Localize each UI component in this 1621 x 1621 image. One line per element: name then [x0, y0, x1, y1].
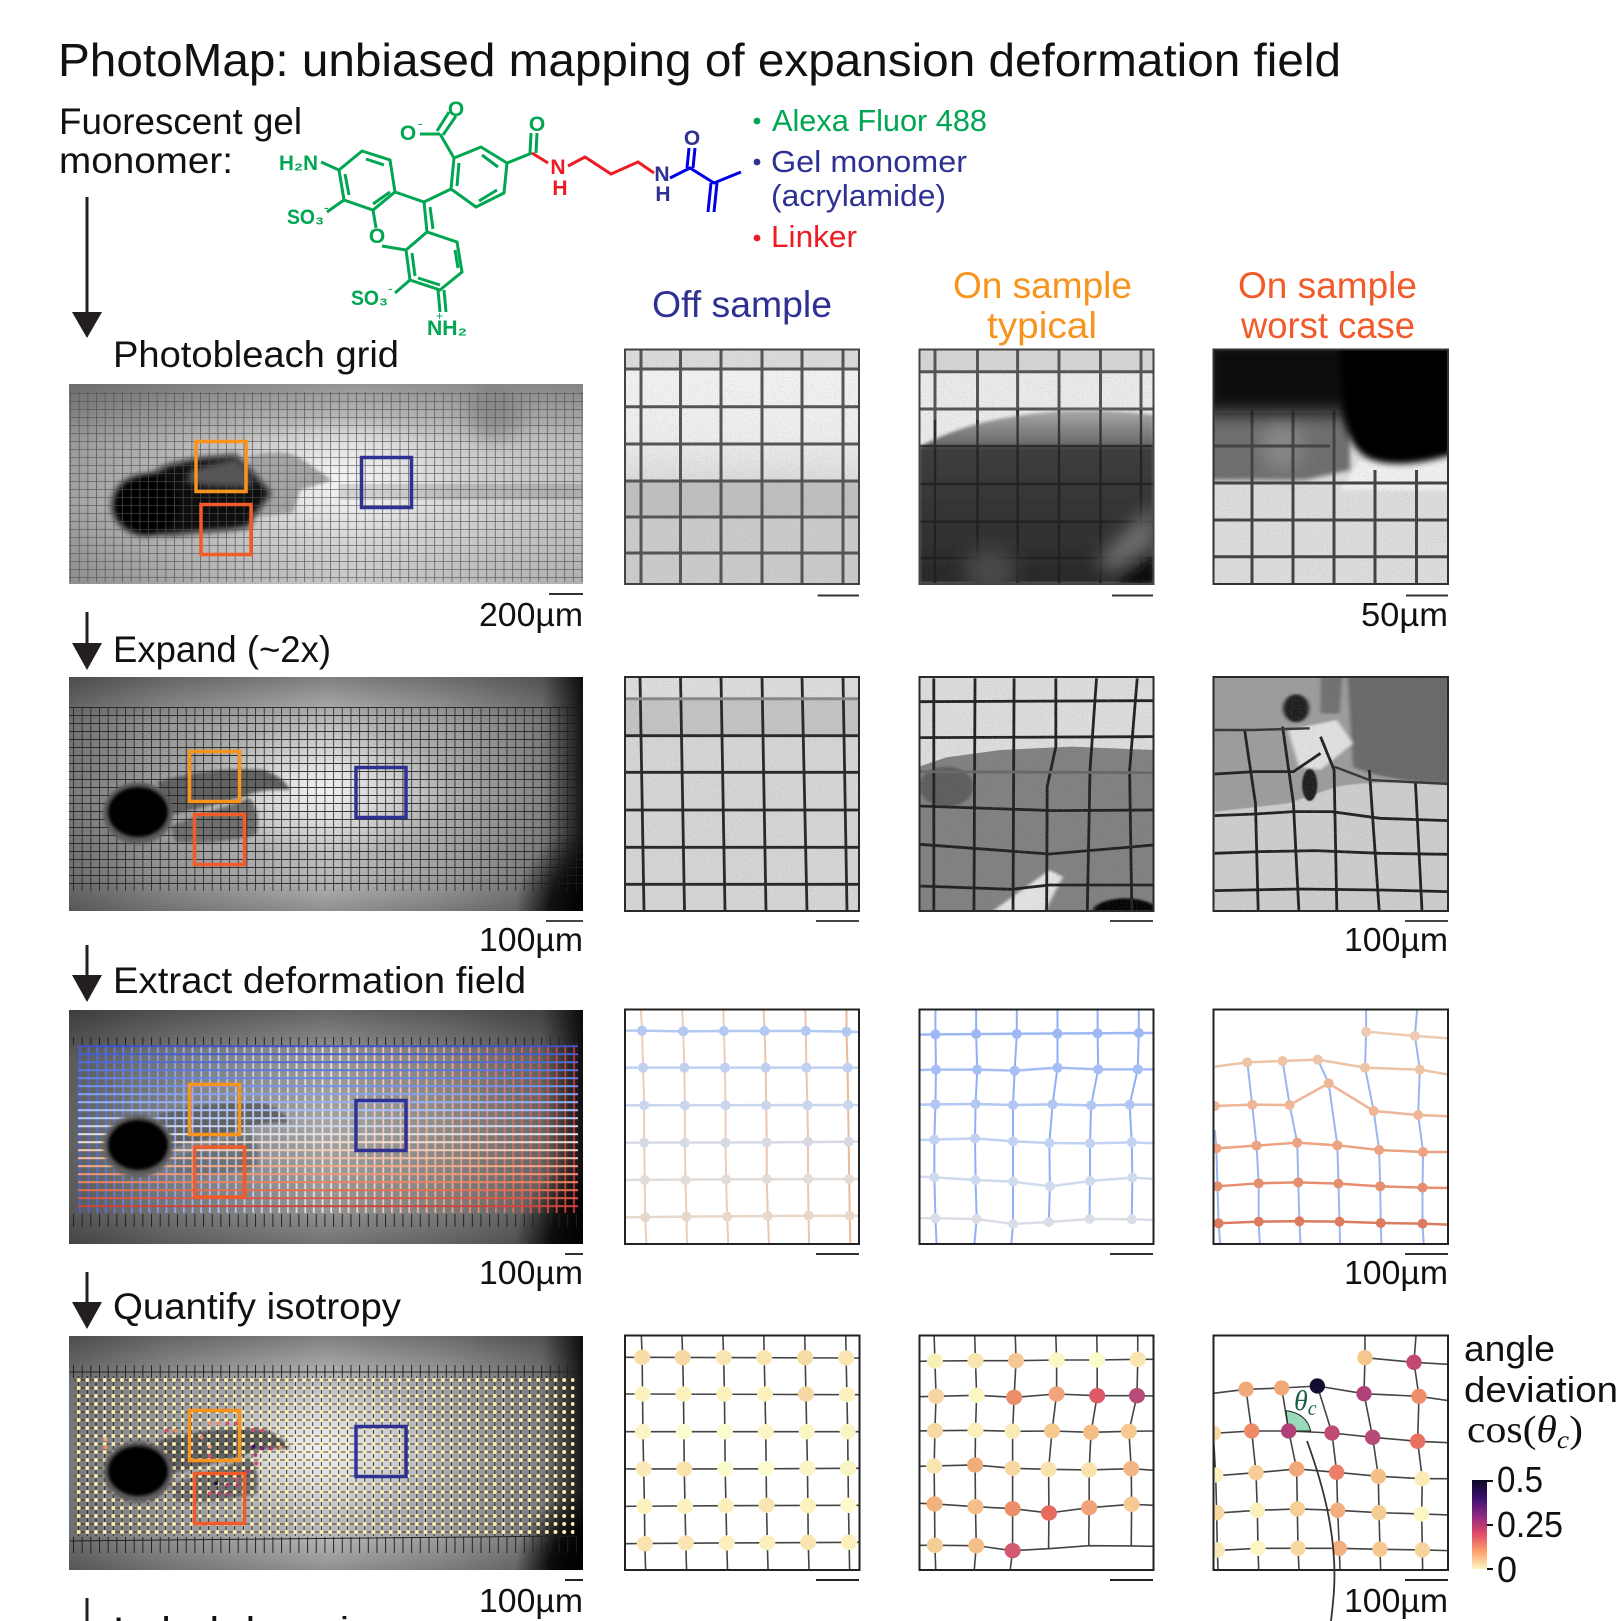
chemical structure: fluorescent gel monomer [279, 98, 741, 340]
frame [1214, 350, 1448, 584]
nodes row 2 [625, 1063, 858, 1073]
frame [920, 677, 1154, 911]
dot grid: local angle deviation [74, 1376, 574, 1536]
panel: isotropy off sample [625, 1336, 859, 1569]
acrylamide part: H [655, 183, 671, 206]
heading: fluorescent gel monomer: monomer: [59, 140, 233, 181]
angle label: theta c: θ [1294, 1386, 1308, 1417]
panel: deformation off sample [625, 1010, 858, 1243]
colorbar heading: angle deviation: deviation [1464, 1369, 1618, 1410]
column heading: on sample typical: On sample [953, 265, 1132, 306]
alexa fluor part: O [400, 122, 416, 145]
panel: expanded on sample typical [920, 678, 1152, 910]
angle label: theta c: c [1308, 1398, 1317, 1420]
colorbar heading: angle deviation [1464, 1328, 1618, 1454]
selection box: worst case [201, 504, 251, 554]
panel: photobleach off sample [624, 349, 860, 584]
frame [920, 350, 1154, 584]
selection box: worst case [194, 1147, 244, 1197]
frame [1214, 1010, 1448, 1244]
arrow: to photobleach grid [72, 197, 102, 338]
frame [1214, 677, 1448, 911]
alexa fluor part: NH₂ [427, 317, 467, 340]
nodes row 4 [1211, 1138, 1449, 1157]
frame [920, 1336, 1154, 1570]
selection box: worst case [194, 814, 244, 864]
frame [1214, 1336, 1448, 1570]
selection box: off sample [356, 1100, 406, 1150]
panel: isotropy overview [69, 1336, 583, 1570]
frame [625, 350, 859, 584]
nodes row 1 [1361, 1027, 1449, 1041]
scale bars and labels: expanded row: 100µm [479, 921, 583, 958]
panel: isotropy on sample typical [919, 1336, 1153, 1569]
scale bars and labels: deformation row: 100µm [1344, 1254, 1448, 1291]
arrow: to quantify isotropy [72, 1272, 102, 1329]
nodes row 5 [919, 1172, 1154, 1191]
column heading: off sample: Off sample [652, 284, 832, 325]
heading: extract deformation field: Extract deformation field [113, 960, 526, 1001]
scale bars and labels: isotropy row: 100µm [479, 1582, 583, 1619]
colorbar heading: angle deviation: cos(θ [1467, 1409, 1555, 1451]
nodes row 1 [625, 1026, 858, 1037]
column heading: on sample typical: typical [987, 305, 1097, 346]
nodes row 3 [919, 1099, 1154, 1110]
panel: photobleach on sample worst case [1214, 350, 1447, 583]
arrow: to extract deformation field [72, 945, 102, 1002]
arrow: to label domains [86, 1598, 88, 1621]
colorbar heading: angle deviation: ) [1569, 1409, 1583, 1451]
selection box: typical [190, 1084, 240, 1134]
frame [625, 1336, 860, 1570]
panel: isotropy on sample worst case [1206, 1336, 1448, 1569]
nodes [1206, 1350, 1430, 1558]
nodes [634, 1350, 857, 1551]
nodes row 3 [1210, 1078, 1449, 1120]
nodes row 1 [919, 1028, 1154, 1039]
panel: photobleach overview image [69, 384, 583, 584]
linker part: H [552, 177, 568, 200]
acrylamide part: O [684, 127, 700, 150]
panel: deformation field overview [69, 1010, 583, 1244]
nodes row 4 [625, 1137, 858, 1148]
nodes row 2 [919, 1063, 1154, 1076]
alexa fluor part: + [436, 309, 443, 323]
legend: structure colours: Gel monomer [771, 144, 967, 179]
nodes row 6 [1214, 1216, 1449, 1229]
nodes row 6 [625, 1211, 858, 1222]
selection box: typical [190, 1410, 240, 1460]
selection box: worst case [194, 1474, 244, 1524]
legend: structure colours: Linker [771, 219, 857, 254]
nodes row 5 [625, 1174, 858, 1185]
scale bars and labels: photobleach row: 200µm [479, 596, 583, 633]
heading: fluorescent gel monomer [59, 101, 302, 181]
scale bars and labels: deformation row: 100µm [479, 1254, 583, 1291]
nodes row 4 [919, 1133, 1154, 1148]
colorbar heading: angle deviation: angle [1464, 1328, 1555, 1369]
callout curve from angle to next step [1307, 1441, 1334, 1621]
panel: photobleach on sample typical [919, 349, 1154, 592]
nodes row 3 [625, 1100, 858, 1110]
nodes row 6 [919, 1213, 1154, 1229]
panel: deformation on sample typical [919, 1010, 1154, 1243]
scale bars and labels: photobleach row: 50µm [1361, 596, 1448, 633]
legend: structure colours [754, 103, 987, 254]
colorbar: cos theta scale: 0 [1497, 1549, 1517, 1590]
column heading: on sample worst case [1238, 265, 1417, 346]
nodes row 2 [1215, 1055, 1449, 1075]
selection box: typical [196, 442, 246, 492]
heading: quantify isotropy: Quantify isotropy [113, 1286, 402, 1327]
selection box: off sample [356, 1426, 406, 1476]
frame [625, 1010, 859, 1244]
acrylamide part: N [654, 163, 670, 186]
column heading: on sample typical [953, 265, 1132, 346]
alexa fluor part: - [388, 280, 393, 296]
legend: structure colours: (acrylamide) [771, 178, 946, 213]
colorbar: cos theta scale [1472, 1459, 1563, 1590]
arrow: to expand [72, 612, 102, 670]
alexa fluor part: O [369, 225, 385, 248]
heading: photobleach grid: Photobleach grid [113, 334, 399, 375]
deformation grid: colour-coded lines [78, 1045, 578, 1213]
linker part: N [550, 156, 566, 179]
colorbar: cos theta scale: 0.5 [1497, 1459, 1543, 1500]
panel: expanded off sample [624, 677, 860, 911]
title: PhotoMap: unbiased mapping of expansion deformation field [58, 34, 1341, 86]
panel: deformation on sample worst case [1210, 1010, 1449, 1243]
alexa fluor part: O [529, 113, 545, 136]
scale bars and labels: expanded row: 100µm [1344, 921, 1448, 958]
alexa fluor part: SO₃ [351, 287, 388, 310]
nodes [926, 1352, 1146, 1558]
column heading: on sample worst case: On sample [1238, 265, 1417, 306]
heading: expand: Expand (~2x) [113, 629, 331, 670]
legend: structure colours: Alexa Fluor 488 [772, 103, 987, 138]
scale bars and labels: deformation row [479, 1254, 1448, 1291]
scale bars and labels: isotropy row [479, 1580, 1448, 1619]
nodes row 5 [1212, 1177, 1449, 1193]
scale bars and labels: expanded row [479, 921, 1448, 958]
colorbar heading: angle deviation: c [1557, 1427, 1569, 1454]
alexa fluor part: O [448, 98, 464, 121]
panel: expanded on sample worst case [1209, 675, 1453, 915]
colorbar: cos theta scale: 0.25 [1497, 1504, 1563, 1545]
frame [920, 1010, 1154, 1244]
panel: expanded overview image [69, 677, 583, 911]
frame [625, 677, 859, 911]
alexa fluor part: H₂N [279, 152, 318, 175]
selection box: off sample [362, 458, 412, 508]
scale bars and labels: isotropy row: 100µm [1344, 1582, 1448, 1619]
linker part [532, 153, 654, 200]
acrylamide part [654, 127, 741, 212]
alexa fluor part: - [418, 115, 423, 131]
scale bars and labels: photobleach row [479, 594, 1448, 633]
alexa fluor part: - [324, 199, 329, 215]
alexa fluor part [279, 98, 545, 340]
angle sector [1286, 1411, 1311, 1431]
column heading: on sample worst case: worst case [1240, 305, 1415, 346]
sample silhouette [112, 452, 332, 535]
selection box: off sample [356, 768, 406, 818]
heading: fluorescent gel monomer: Fuorescent gel [59, 101, 302, 142]
selection box: typical [190, 752, 240, 802]
alexa fluor part: SO₃ [287, 206, 324, 229]
